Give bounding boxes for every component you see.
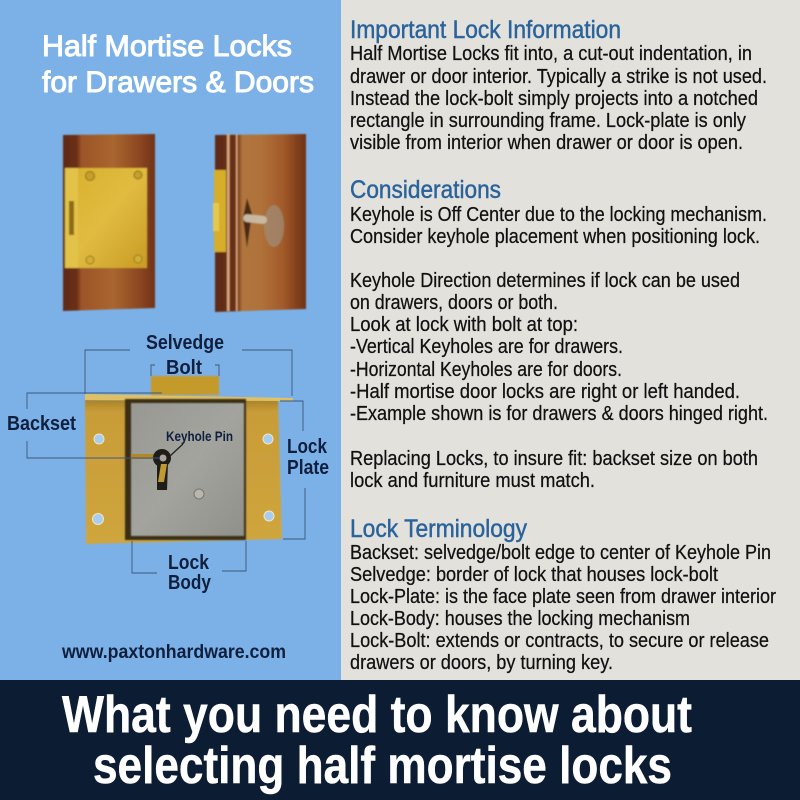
section: Considerations: Keyhole Direction determines if lock can be used <box>350 270 740 292</box>
section: Important Lock Information <box>350 16 767 154</box>
website: www.paxtonhardware.com <box>61 642 286 663</box>
section: Considerations: lock and furniture must match. <box>350 470 595 492</box>
diagram: lock <box>85 376 293 544</box>
section: Important Lock Information: rectangle in surrounding frame. Lock-plate is only <box>350 110 746 132</box>
right panel background <box>341 0 800 680</box>
title: for Drawers & Doors <box>42 66 314 99</box>
footer banner: What you need to know about <box>62 686 692 744</box>
section: Considerations: Consider keyhole placement when positioning lock. <box>350 226 760 248</box>
label: Bolt: Bolt <box>166 357 202 379</box>
keyhole and pin <box>131 449 171 490</box>
dimension lines <box>27 350 305 573</box>
section: Considerations: -Half mortise door locks are right or left handed. <box>350 381 740 403</box>
label: Lock Plate: Plate <box>287 457 329 479</box>
photo: drawer front interior with lock plate <box>63 134 155 311</box>
section: Important Lock Information: visible from interior when drawer or door is open. <box>350 132 743 154</box>
label: Keyhole Pin: Keyhole Pin <box>166 428 233 444</box>
mounting holes <box>92 434 274 524</box>
section: Considerations: Look at lock with bolt at top: <box>350 314 578 336</box>
label: Lock Plate <box>287 436 329 479</box>
lock body <box>125 399 246 540</box>
section: Lock Terminology <box>350 515 776 674</box>
title <box>42 30 314 99</box>
label: Lock Body: Lock <box>168 552 210 574</box>
section: Important Lock Information: Instead the lock-bolt simply projects into a notched <box>350 88 758 110</box>
section: Considerations: on drawers, doors or both. <box>350 292 558 314</box>
section: Considerations: Considerations <box>350 176 501 204</box>
label: Lock Plate: Lock <box>287 436 328 458</box>
section: Considerations: -Vertical Keyholes are for drawers. <box>350 336 623 358</box>
left panel background <box>0 0 341 680</box>
section: Lock Terminology: Lock-Body: houses the locking mechanism <box>350 608 690 630</box>
lock bolt <box>151 376 219 395</box>
section: Considerations: -Horizontal Keyholes are for doors. <box>350 359 622 381</box>
rivet <box>194 489 204 499</box>
section: Important Lock Information: Half Mortise Locks fit into, a cut-out indentation, in <box>350 43 752 65</box>
lock plate <box>85 400 282 544</box>
selvedge <box>85 394 293 401</box>
section: Important Lock Information: Important Lock Information <box>350 16 621 44</box>
section: Lock Terminology: drawers or doors, by turning key. <box>350 652 613 674</box>
section: Considerations <box>350 176 768 492</box>
section: Lock Terminology: Lock Terminology <box>350 515 527 543</box>
footer banner <box>0 680 800 800</box>
footer banner: selecting half mortise locks <box>93 737 672 795</box>
label: Selvedge: Selvedge <box>146 332 224 354</box>
section: Considerations: Replacing Locks, to insure fit: backset size on both <box>350 448 758 470</box>
title: Half Mortise Locks <box>42 30 292 63</box>
label: Backset: Backset <box>7 413 76 435</box>
section: Lock Terminology: Lock-Bolt: extends or contracts, to secure or release <box>350 630 769 652</box>
section: Lock Terminology: Selvedge: border of lock that houses lock-bolt <box>350 564 718 586</box>
photo: door exterior with key <box>213 134 306 312</box>
section: Important Lock Information: drawer or door interior. Typically a strike is not used. <box>350 66 767 88</box>
label: Lock Body: Body <box>168 572 212 594</box>
section: Considerations: -Example shown is for drawers & doors hinged right. <box>350 403 768 425</box>
label: Lock Body <box>168 552 212 594</box>
